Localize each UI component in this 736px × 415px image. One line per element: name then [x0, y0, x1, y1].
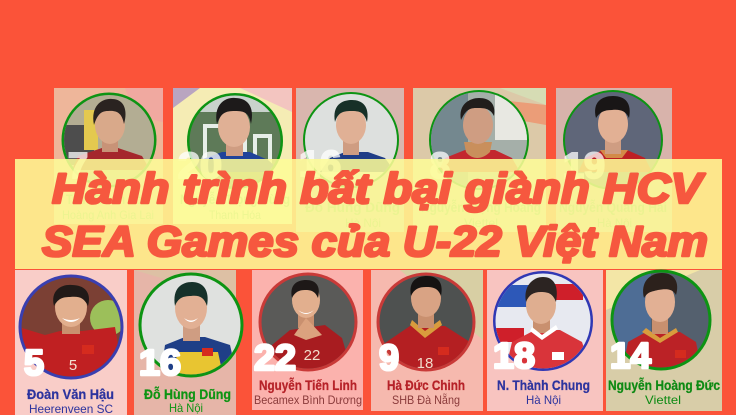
card: Nguyễn Tiến Linh: 22	[304, 347, 320, 364]
club: SHB Đà Nẵng	[392, 392, 460, 407]
card: player 7: Hoàng Anh Gia Lai	[62, 208, 154, 222]
club: Becamex Bình Dương	[254, 393, 362, 407]
card: player 20: Nguyễn Trọng Hùng	[180, 191, 290, 207]
name: Đỗ Hùng Dũng	[144, 386, 231, 402]
card: player 16 top: Đỗ Hùng Dũng	[305, 199, 400, 215]
title: Hành trình bất bại giành HCV	[52, 165, 706, 213]
name: N. Thành Chung	[497, 377, 590, 393]
number: 9	[379, 337, 399, 378]
name: Hà Đức Chinh	[387, 377, 465, 393]
card: player 7: Trần Thanh Sơn	[66, 191, 150, 207]
card: player 8: 8	[430, 145, 450, 186]
card: player 16 top: Hà Nội	[345, 216, 381, 230]
card: Nguyễn Hoàng Đức	[606, 270, 722, 411]
card: player 16 top	[296, 88, 404, 232]
card: Đoàn Văn Hậu: 5	[69, 357, 77, 374]
number: 22	[254, 337, 296, 378]
title: SEA Games của U-22 Việt Nam	[42, 218, 708, 266]
number: 18	[493, 335, 535, 376]
title	[42, 165, 708, 266]
number: 14	[610, 335, 651, 376]
infographic	[15, 88, 722, 415]
card: player 20: Thanh Hóa	[209, 208, 261, 222]
card: player 19	[556, 88, 672, 232]
card: player 19: Nguyễn Quang Hải	[559, 199, 667, 215]
card: player 19: 19	[563, 145, 605, 186]
name: Đoàn Văn Hậu	[27, 386, 114, 402]
card: Hà Đức Chinh	[371, 270, 483, 411]
banner	[15, 159, 722, 269]
card: Đỗ Hùng Dũng	[134, 270, 244, 415]
number: 16	[139, 342, 181, 383]
card: player 7	[54, 88, 163, 224]
card: player 19: Hà Nội	[597, 216, 632, 230]
card: player 20: 20	[178, 145, 222, 186]
card: N. Thành Chung	[487, 270, 603, 411]
card: Đoàn Văn Hậu	[15, 270, 127, 415]
name: Nguyễn Tiến Linh	[259, 377, 357, 393]
card: Nguyễn Tiến Linh	[252, 270, 363, 410]
number: 5	[24, 342, 44, 383]
card: player 16 top: 16	[299, 143, 341, 184]
club: Viettel	[645, 393, 681, 407]
club: Hà Nội	[169, 401, 203, 415]
club: Hà Nội	[526, 393, 561, 407]
card: player 8: Viettel	[464, 216, 498, 230]
card: player 7: 7	[68, 145, 88, 186]
card: Hà Đức Chinh: 18	[417, 355, 433, 372]
name: Nguyễn Hoàng Đức	[608, 377, 720, 393]
card: player 8	[413, 88, 546, 232]
card: player 20	[173, 88, 292, 224]
card: player 8: Nguyễn Trọng Hoàng	[421, 199, 541, 215]
